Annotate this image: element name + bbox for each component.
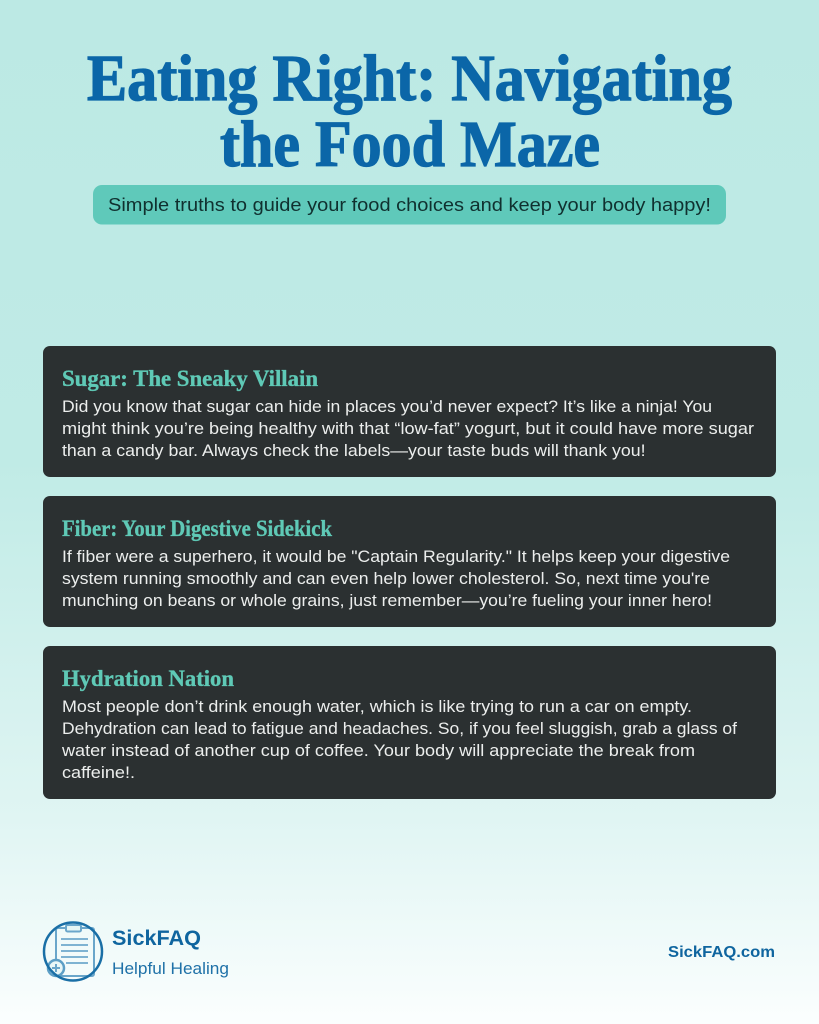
title: the Food Maze: [220, 108, 600, 181]
text block: sugar: might think you’re being healthy with that “low-fat” yogurt, but it could have more sugar: [62, 420, 755, 438]
title: Eating Right: Navigating: [87, 42, 732, 115]
heading: hydration: Hydration Nation: [62, 666, 234, 691]
text block: sugar: Did you know that sugar can hide in places you’d never expect? It’s like a ninja! You: [62, 398, 712, 416]
text block: hydration: Dehydration can lead to fatigue and headaches. So, if you feel sluggish, grab a glass of: [62, 720, 738, 738]
text block: hydration: water instead of another cup of coffee. Your body will appreciate the break from: [61, 742, 695, 760]
title: [87, 42, 732, 181]
text block: sugar: [62, 398, 755, 460]
text block: fiber: [62, 548, 730, 610]
subtitle pill: [93, 185, 726, 224]
text block: fiber: munching on beans or whole grains, just remember—you’re fueling your inner hero!: [62, 592, 712, 610]
text block: hydration: caffeine!.: [62, 764, 135, 782]
heading: sugar: Sugar: The Sneaky Villain: [62, 366, 318, 391]
text block: fiber: system running smoothly and can even help lower cholesterol. So, next time you're: [62, 570, 710, 588]
panel: sugar: [43, 346, 776, 477]
icon: clipboard logo: [44, 922, 102, 980]
panel: hydration: [43, 646, 776, 799]
website: SickFAQ.com: [668, 944, 775, 961]
subtitle pill: Simple truths to guide your food choices and keep your body happy!: [108, 194, 711, 215]
text block: fiber: If fiber were a superhero, it would be "Captain Regularity." It helps keep your digestive: [62, 548, 730, 566]
panel: fiber: [43, 496, 776, 627]
text block: hydration: [61, 698, 738, 782]
text block: hydration: Most people don’t drink enough water, which is like trying to run a car on empty.: [62, 698, 692, 716]
brand name: SickFAQ: [112, 927, 201, 950]
text block: sugar: than a candy bar. Always check the labels—your taste buds will thank you!: [62, 442, 645, 460]
heading: fiber: Fiber: Your Digestive Sidekick: [62, 516, 332, 541]
tagline: Helpful Healing: [112, 960, 229, 978]
